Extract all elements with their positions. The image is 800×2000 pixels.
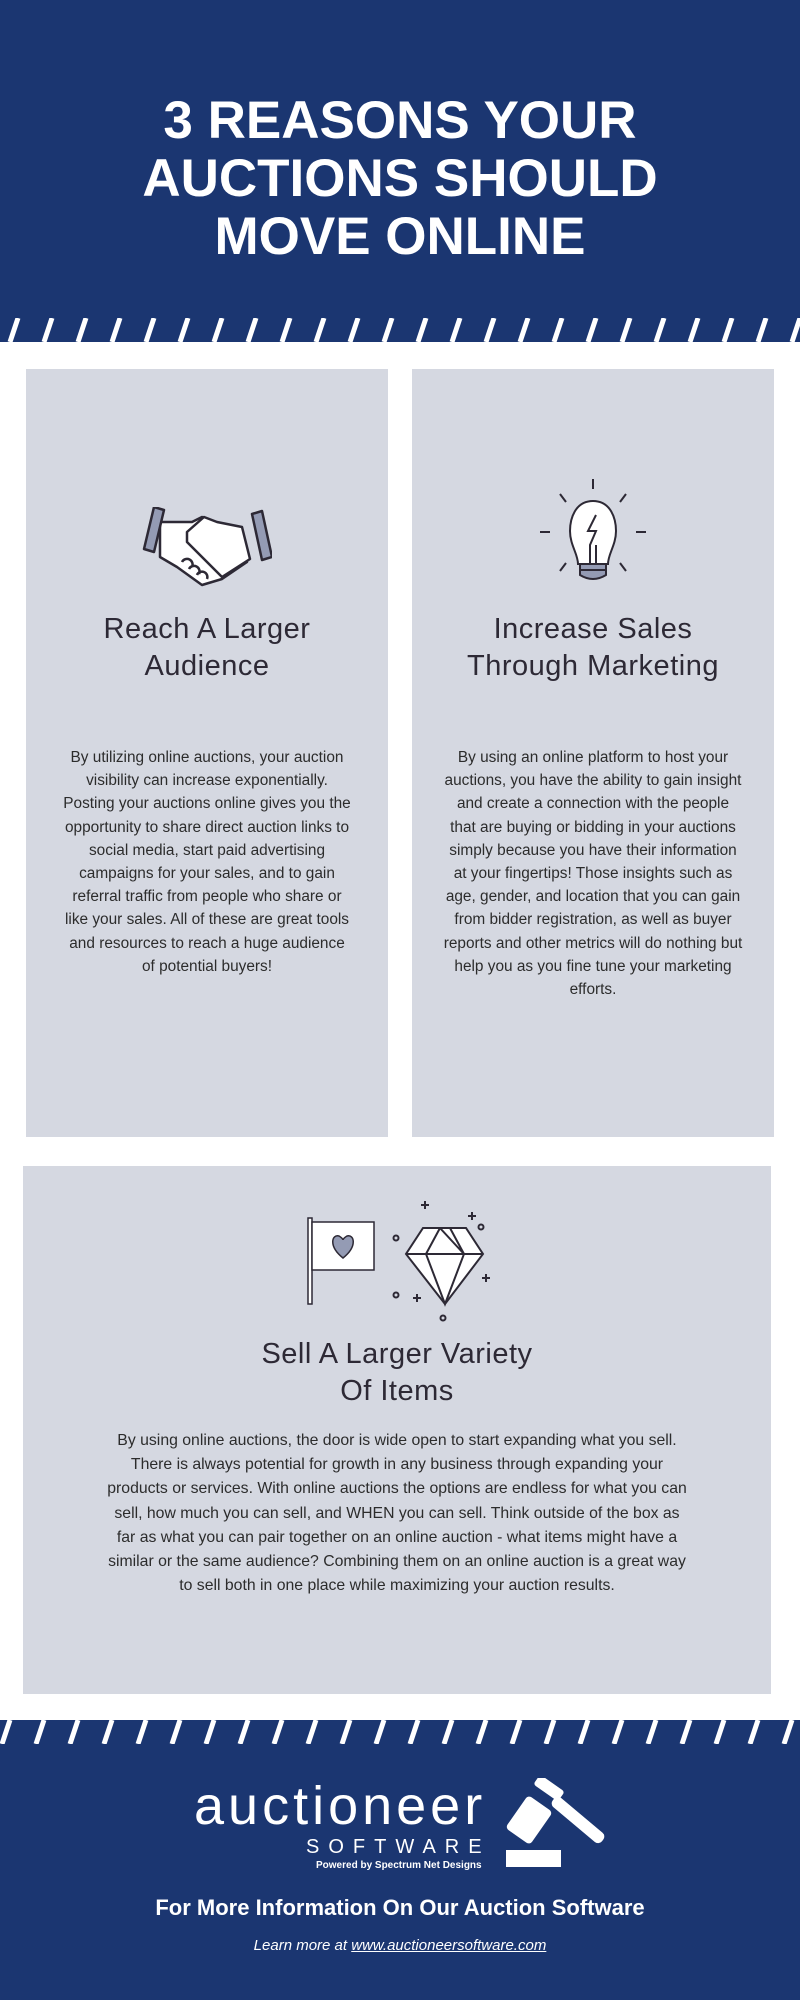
panel: sell a larger variety of items: [23, 1166, 771, 1694]
heading: [261, 1338, 533, 1407]
panel: increase sales through marketing: [412, 369, 774, 1137]
text block: By using an online platform to host your auctions, you have the ability to gain insight and create a connection with the people that are buying or bidding in your auctions simply because you have their information at your fingertips! Those insights such as age, gender, and location that you can gain from bidder registration, as well as buyer reports and other metrics will do nothing but help you as you fine tune your marketing efforts.: [444, 749, 742, 998]
heading: Through Marketing: [467, 650, 719, 682]
call to action: For More Information On Our Auction Software: [155, 1895, 645, 1920]
title: [142, 91, 658, 266]
footer: [0, 1720, 800, 2000]
title: MOVE ONLINE: [214, 207, 586, 266]
heading: [467, 613, 719, 682]
link text: Learn more at www.auctioneersoftware.com: [254, 1937, 546, 1954]
logo: Powered by Spectrum Net Designs: [316, 1860, 482, 1871]
heading: Reach A Larger: [104, 613, 310, 645]
text block: By using online auctions, the door is wide open to start expanding what you sell. There is always potential for growth in any business through expanding your products or services. With online auctions the options are endless for what you can sell, how much you can sell, and WHEN you can sell. Think outside of the box as far as what you can pair together on an online auction - what items might have a similar or the same audience? Combining them on an online auction is a great way to sell both in one place while maximizing your auction results.: [107, 1432, 687, 1594]
icon: lightbulb: [540, 479, 646, 580]
heading: Sell A Larger Variety: [261, 1338, 533, 1370]
title: 3 REASONS YOUR: [163, 91, 637, 150]
stripes top: [8, 318, 800, 342]
heading: [104, 613, 310, 682]
logo: auctioneer: [194, 1776, 486, 1836]
heading: Audience: [145, 650, 269, 682]
icon: handshake: [142, 507, 272, 586]
icon: flag with heart: [307, 1217, 375, 1305]
logo: SOFTWARE: [306, 1836, 491, 1858]
icon: diamond with sparkles: [392, 1201, 490, 1322]
stripes bottom: [0, 1720, 794, 1744]
panel: reach a larger audience: [26, 369, 388, 1137]
header band: [0, 0, 800, 342]
title: AUCTIONS SHOULD: [142, 149, 658, 208]
heading: Of Items: [340, 1375, 454, 1407]
icon: gavel: [506, 1778, 604, 1867]
text block: By utilizing online auctions, your auction visibility can increase exponentially. Posting your auctions online gives you the opportunity to share direct auction links to social media, start paid advertising campaigns for your sales, and to gain referral traffic from people who share or like your sales. All of these are great tools and resources to reach a huge audience of potential buyers!: [63, 749, 351, 975]
heading: Increase Sales: [494, 613, 692, 645]
logo: [194, 1776, 604, 1871]
